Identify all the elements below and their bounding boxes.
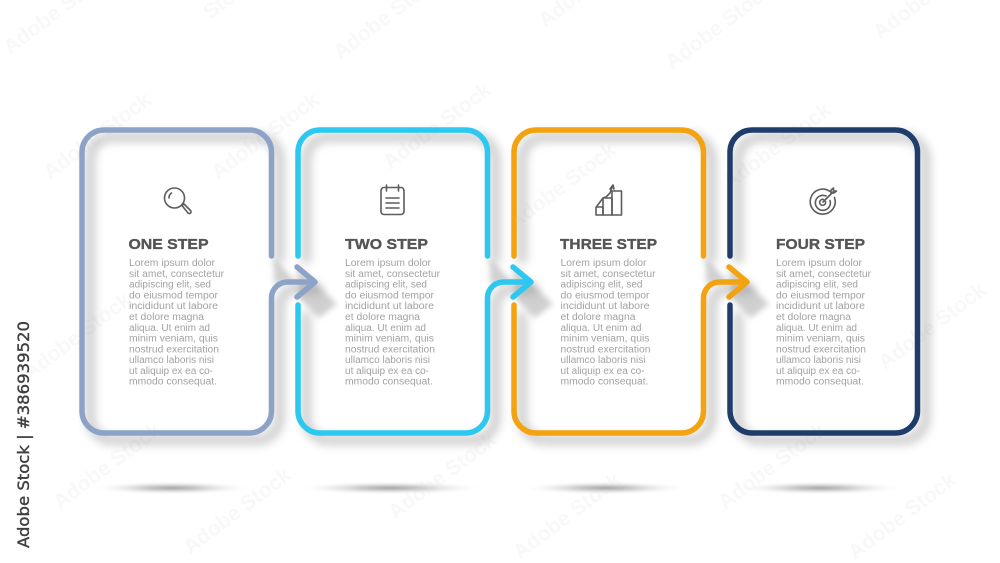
body text: three step: Lorem ipsum dolor bbox=[560, 258, 647, 269]
body text: one step: adipiscing elit, sed bbox=[129, 280, 211, 290]
body text: three step: mmodo consequat. bbox=[560, 376, 648, 388]
body text: one step: et dolore magna bbox=[129, 312, 205, 323]
watermark pattern: Adobe Stock bbox=[49, 418, 166, 514]
panel: three step bbox=[514, 130, 747, 433]
body text: two step: do eiusmod tempor bbox=[345, 290, 435, 302]
body text: four step: nostrud exercitation bbox=[776, 344, 866, 356]
body text: one step: ullamco laboris nisi bbox=[129, 355, 214, 366]
body text: three step: ullamco laboris nisi bbox=[560, 355, 646, 366]
panel: two step bbox=[298, 130, 531, 433]
watermark pattern: Adobe Stock bbox=[714, 418, 831, 514]
ground shadows bbox=[90, 481, 905, 495]
body text: four step: ullamco laboris nisi bbox=[776, 355, 861, 366]
body text: two step: ut aliquip ex ea co- bbox=[345, 366, 429, 377]
body text: three step: et dolore magna bbox=[560, 312, 636, 323]
watermark pattern: Adobe Stock bbox=[19, 288, 136, 384]
body text: four step: ut aliquip ex ea co- bbox=[776, 366, 860, 377]
watermark pattern: Adobe Stock bbox=[504, 138, 621, 234]
card shadows bbox=[90, 137, 926, 440]
heading: two step: TWO STEP bbox=[345, 236, 428, 253]
body text: three step: minim veniam, quis bbox=[560, 334, 650, 344]
watermark pattern: Adobe Stock bbox=[379, 78, 496, 174]
panel: one step bbox=[82, 130, 315, 433]
border and arrow: two step bbox=[298, 130, 531, 433]
body text: four step bbox=[776, 258, 872, 388]
body text: one step: nostrud exercitation bbox=[129, 344, 219, 356]
border and arrow: three step bbox=[514, 130, 747, 433]
body text: one step: incididunt ut labore bbox=[129, 301, 219, 312]
body text: three step: nostrud exercitation bbox=[560, 344, 650, 356]
body text: two step: adipiscing elit, sed bbox=[345, 280, 427, 290]
body text: two step: ullamco laboris nisi bbox=[345, 355, 430, 366]
watermark pattern: Adobe Stock bbox=[384, 428, 501, 524]
body text: three step: incididunt ut labore bbox=[560, 301, 650, 312]
body text: four step: et dolore magna bbox=[776, 312, 852, 323]
watermark pattern: Adobe Stock bbox=[874, 278, 991, 374]
body text: three step: aliqua. Ut enim ad bbox=[560, 323, 642, 334]
body text: four step: aliqua. Ut enim ad bbox=[776, 323, 857, 334]
body text: one step: mmodo consequat. bbox=[129, 376, 217, 388]
body text: one step: aliqua. Ut enim ad bbox=[129, 323, 210, 334]
body text: four step: adipiscing elit, sed bbox=[776, 280, 858, 290]
body text: three step: do eiusmod tempor bbox=[560, 290, 650, 302]
body text: one step: minim veniam, quis bbox=[129, 334, 218, 344]
heading: four step: FOUR STEP bbox=[776, 236, 865, 253]
watermark pattern: Adobe Stock bbox=[509, 468, 626, 563]
body text: two step bbox=[345, 258, 441, 388]
body text: one step: sit amet, consectetur bbox=[129, 269, 225, 280]
body text: four step: mmodo consequat. bbox=[776, 376, 864, 388]
icon: magnifier bbox=[164, 188, 191, 214]
body text: three step: sit amet, consectetur bbox=[560, 269, 656, 280]
body text: two step: sit amet, consectetur bbox=[345, 269, 441, 280]
body text: two step: mmodo consequat. bbox=[345, 376, 433, 388]
icon: growth chart bbox=[596, 185, 622, 215]
heading: three step: THREE STEP bbox=[560, 236, 657, 253]
border and arrow: one step bbox=[82, 130, 315, 433]
heading: one step: ONE STEP bbox=[128, 236, 208, 253]
body text: two step: et dolore magna bbox=[345, 312, 421, 323]
watermark pattern: Adobe Stock bbox=[207, 88, 324, 184]
body text: two step: Lorem ipsum dolor bbox=[345, 258, 432, 269]
icon: notepad bbox=[381, 185, 404, 214]
body text: one step: do eiusmod tempor bbox=[129, 290, 219, 302]
body text: two step: incididunt ut labore bbox=[345, 301, 435, 312]
body text: one step: ut aliquip ex ea co- bbox=[129, 366, 213, 377]
body text: one step bbox=[129, 258, 225, 388]
stock id side label: Adobe Stock | #386939520 bbox=[14, 321, 33, 548]
watermark pattern: Adobe Stock bbox=[39, 88, 156, 184]
body text: three step bbox=[560, 258, 656, 388]
body text: two step: nostrud exercitation bbox=[345, 344, 435, 356]
watermark pattern: Adobe Stock bbox=[179, 463, 296, 559]
body text: one step: Lorem ipsum dolor bbox=[129, 258, 216, 269]
body text: three step: adipiscing elit, sed bbox=[560, 280, 642, 290]
border: four step bbox=[730, 130, 918, 433]
arrow long shadows bbox=[274, 258, 769, 318]
icon: target bbox=[810, 188, 836, 214]
panel: four step bbox=[730, 130, 918, 433]
watermark pattern: Adobe Stock bbox=[844, 468, 961, 563]
body text: two step: aliqua. Ut enim ad bbox=[345, 323, 426, 334]
body text: four step: sit amet, consectetur bbox=[776, 269, 872, 280]
body text: three step: ut aliquip ex ea co- bbox=[560, 366, 644, 377]
body text: four step: Lorem ipsum dolor bbox=[776, 258, 863, 269]
body text: two step: minim veniam, quis bbox=[345, 334, 434, 344]
watermark pattern: Adobe Stock bbox=[719, 98, 836, 194]
body text: four step: do eiusmod tempor bbox=[776, 290, 866, 302]
body text: four step: incididunt ut labore bbox=[776, 301, 866, 312]
body text: four step: minim veniam, quis bbox=[776, 334, 865, 344]
